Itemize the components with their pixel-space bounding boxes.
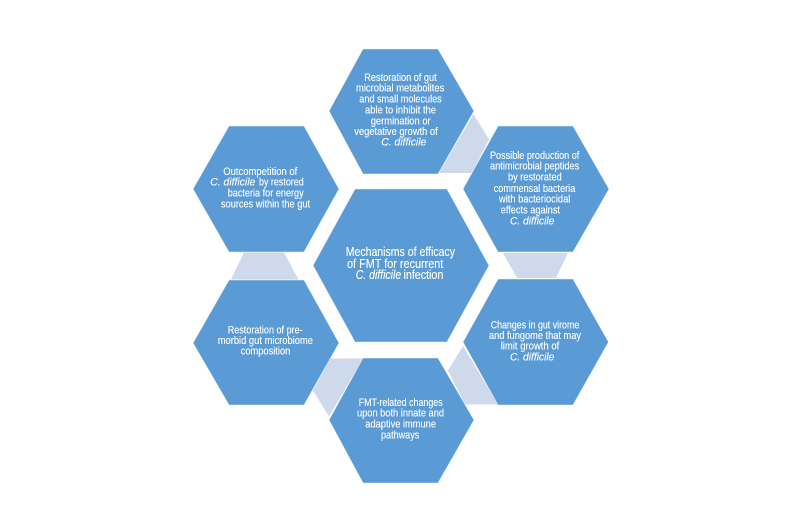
text: gut microbial metabolites: Restoration of gut	[364, 72, 437, 84]
text: gut microbial metabolites	[354, 72, 445, 149]
text: outcompetition: bacteria for energy	[228, 188, 304, 200]
text: antimicrobial peptides	[490, 150, 580, 227]
connector: bottom to lower left	[313, 358, 363, 416]
text: immune pathways	[357, 397, 444, 441]
connector: lower right to bottom	[448, 346, 498, 404]
text: immune pathways: adaptive immune	[365, 418, 436, 430]
text: gut microbial metabolites: vegetative growth of	[354, 126, 438, 138]
text: gut microbial metabolites: and small molecules	[359, 93, 442, 105]
text: antimicrobial peptides: Possible production of	[490, 150, 580, 162]
text: gut microbial metabolites: germination or	[371, 115, 431, 127]
panel: upper left hexagon	[193, 126, 339, 252]
panel: top hexagon	[329, 49, 474, 174]
heading: mechanisms of efficacy: of FMT for recurrent	[347, 256, 444, 271]
text: antimicrobial peptides: C. difficile	[510, 215, 554, 227]
heading: mechanisms of efficacy: infection	[404, 267, 443, 282]
text: virome and fungome: Changes in gut virome	[491, 319, 579, 331]
text: outcompetition	[210, 166, 310, 211]
text: antimicrobial peptides: commensal bacteria	[494, 183, 576, 195]
heading: mechanisms of efficacy	[346, 244, 455, 282]
text: gut microbial metabolites: microbial metabolites	[356, 83, 445, 95]
text: immune pathways: upon both innate and	[357, 408, 444, 420]
connector: top to upper right	[439, 114, 489, 173]
text: antimicrobial peptides: with bacteriocidal	[498, 194, 570, 206]
text: outcompetition: Outcompetition of	[223, 166, 298, 178]
text: pre-morbid microbiome: morbid gut microbiome	[218, 335, 313, 347]
text: antimicrobial peptides: by restorated	[508, 172, 562, 184]
text: antimicrobial peptides: effects against	[501, 205, 560, 217]
text: virome and fungome: limit growth of	[501, 341, 560, 353]
text: outcompetition: sources within the gut	[221, 199, 310, 211]
text: virome and fungome: C. difficile	[510, 351, 554, 363]
text: gut microbial metabolites: able to inhibit the	[365, 105, 436, 117]
text: gut microbial metabolites: C. difficile	[381, 137, 426, 149]
text: pre-morbid microbiome: Restoration of pre-	[228, 324, 303, 336]
connector: lower left to upper left	[231, 252, 298, 280]
text: antimicrobial peptides: antimicrobial peptides	[490, 161, 580, 173]
heading: mechanisms of efficacy: C. difficile	[356, 267, 401, 282]
panel: bottom hexagon	[329, 358, 474, 483]
text: pre-morbid microbiome	[218, 324, 313, 358]
text: pre-morbid microbiome: composition	[241, 346, 290, 358]
text: immune pathways: FMT-related changes	[359, 397, 443, 409]
panel: center hexagon	[313, 189, 489, 342]
text: immune pathways: pathways	[381, 429, 420, 441]
text: virome and fungome: and fungome that may	[489, 330, 581, 342]
connector: upper right to lower right	[503, 253, 568, 278]
panel: lower right hexagon	[463, 279, 608, 405]
panel: upper right hexagon	[463, 126, 609, 252]
heading: mechanisms of efficacy: Mechanisms of efficacy	[346, 244, 455, 259]
text: virome and fungome	[489, 319, 581, 363]
text: outcompetition: by restored	[259, 177, 304, 189]
panel: lower left hexagon	[193, 280, 339, 405]
text: outcompetition: C. difficile	[210, 177, 255, 189]
